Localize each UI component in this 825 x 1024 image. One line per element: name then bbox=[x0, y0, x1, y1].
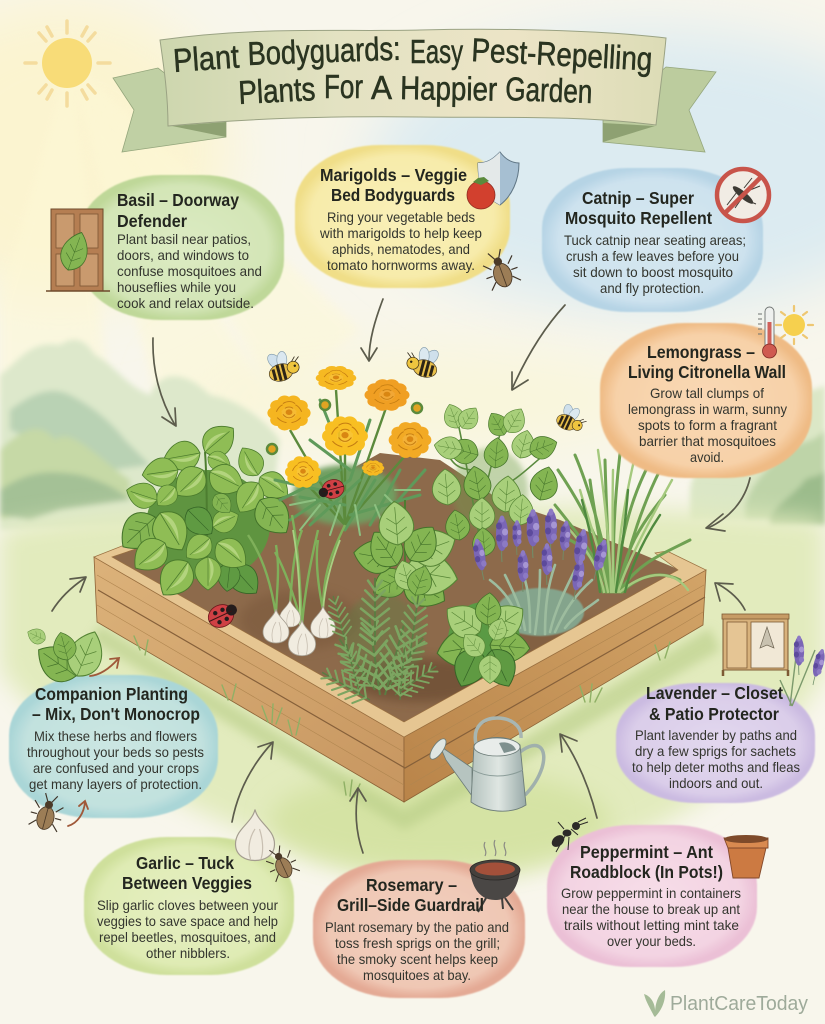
arrow: catnip to plant bbox=[512, 305, 565, 390]
title banner: For bbox=[324, 68, 363, 105]
panel: marigolds: Ring your vegetable beds bbox=[327, 209, 475, 225]
icon: terracotta pot bbox=[724, 835, 768, 878]
panel: companion planting: throughout your beds so pests bbox=[27, 744, 204, 760]
title banner: Bodyguards: bbox=[247, 30, 401, 72]
icon: beetle and arrow bbox=[27, 791, 88, 833]
panel: rosemary: Plant rosemary by the patio and bbox=[325, 919, 509, 935]
panel: companion planting: are confused and your crops bbox=[33, 760, 199, 776]
panel: catnip: Tuck catnip near seating areas; bbox=[564, 232, 746, 248]
panel: marigolds bbox=[295, 145, 522, 292]
arrow: basil to plant bbox=[153, 338, 176, 426]
panel: basil: Basil – Doorway bbox=[117, 190, 239, 210]
title banner: Pest-Repelling bbox=[471, 31, 653, 77]
panel: basil: Defender bbox=[117, 211, 187, 231]
icon: thermometer and sun bbox=[758, 306, 813, 358]
arrow: garlic to bed bbox=[232, 742, 273, 822]
panel: companion planting bbox=[9, 625, 218, 833]
panel: garlic: Slip garlic cloves between your bbox=[97, 897, 278, 913]
panel: companion planting: get many layers of protection. bbox=[29, 776, 202, 792]
arrow: peppermint to bed bbox=[560, 734, 597, 818]
panel: marigolds: with marigolds to help keep bbox=[319, 225, 482, 241]
panel: companion planting: Mix these herbs and flowers bbox=[34, 728, 197, 744]
panel: lemongrass: spots to form a fragrant bbox=[638, 417, 777, 433]
panel: catnip: Catnip – Super bbox=[582, 188, 694, 208]
icon: grill bbox=[470, 840, 520, 912]
title banner: A bbox=[371, 69, 392, 106]
watering can bbox=[427, 718, 544, 811]
plant: peppermint bbox=[434, 592, 532, 693]
panel: peppermint: near the house to break up ant bbox=[562, 901, 740, 917]
panel: garlic: other nibblers. bbox=[146, 945, 230, 961]
panel: peppermint: Roadblock (In Pots!) bbox=[570, 862, 723, 882]
arrow: rosemary to bed bbox=[350, 788, 366, 853]
title banner: Easy bbox=[410, 33, 463, 70]
icon: lavender sprigs bbox=[780, 635, 825, 706]
background hills bbox=[0, 340, 825, 530]
plant: marigolds bbox=[267, 366, 431, 535]
panel: rosemary bbox=[313, 840, 525, 998]
panel: lavender: to help deter moths and fleas bbox=[632, 759, 800, 775]
panel: catnip: sit down to boost mosquito bbox=[573, 264, 733, 280]
panel: lavender: dry a few sprigs for sachets bbox=[635, 743, 796, 759]
icon: leaves and arrow bbox=[25, 625, 119, 690]
title banner: Plant bbox=[172, 37, 240, 79]
grass tufts bbox=[134, 636, 670, 797]
ladybug on bed bbox=[205, 599, 242, 631]
panel: lemongrass: avoid. bbox=[690, 449, 724, 465]
icon: closet with moth bbox=[722, 614, 789, 676]
panel: lemongrass bbox=[600, 306, 813, 478]
icon: garlic bulb and beetle bbox=[236, 810, 301, 883]
panel: lavender bbox=[616, 614, 825, 803]
bed: soil bbox=[112, 453, 680, 722]
title banner bbox=[113, 29, 716, 152]
panel: peppermint: over your beds. bbox=[607, 933, 696, 949]
raised garden bed bbox=[90, 453, 720, 830]
icon: beetle bbox=[479, 246, 522, 292]
panel: garlic: Between Veggies bbox=[122, 873, 252, 893]
panel: lemongrass: barrier that mosquitoes bbox=[639, 433, 776, 449]
panel: lavender: & Patio Protector bbox=[649, 704, 779, 724]
panel: rosemary: the smoky scent helps keep bbox=[337, 951, 498, 967]
bed: right wall bbox=[404, 570, 706, 802]
panel: companion planting: Companion Planting bbox=[35, 684, 188, 704]
panel: catnip: crush a few leaves before you bbox=[566, 248, 739, 264]
plant: basil bbox=[111, 417, 299, 605]
title banner: Plants bbox=[237, 70, 316, 111]
arrow: lavender to bed bbox=[715, 583, 745, 610]
icon: door with leaf bbox=[46, 209, 110, 291]
panel: catnip: and fly protection. bbox=[600, 280, 704, 296]
panel: lemongrass: lemongrass in warm, sunny bbox=[628, 401, 787, 417]
panel: marigolds: aphids, nematodes, and bbox=[332, 241, 470, 257]
bed: left wall bbox=[94, 557, 404, 802]
panel: lemongrass: Living Citronella Wall bbox=[628, 362, 786, 382]
panel: catnip: Mosquito Repellent bbox=[565, 208, 712, 228]
panel: marigolds: Marigolds – Veggie bbox=[320, 165, 467, 185]
logo: PlantCareToday: PlantCareToday bbox=[670, 993, 808, 1015]
panel: peppermint bbox=[547, 818, 768, 967]
arrow: marigolds to plant bbox=[361, 299, 383, 361]
arrow: companion to bed bbox=[52, 577, 86, 611]
title banner: Garden bbox=[505, 70, 593, 110]
icon: shield and tomato bbox=[467, 152, 519, 209]
panel: basil: houseflies while you bbox=[117, 279, 236, 295]
panel: basil: confuse mosquitoes and bbox=[117, 263, 262, 279]
plant: catnip bbox=[431, 401, 562, 557]
illustration: sun bbox=[25, 21, 110, 106]
panel: peppermint: trails without letting mint take bbox=[564, 917, 739, 933]
arrow: lemongrass to plant bbox=[706, 478, 750, 531]
plant: garlic bbox=[205, 515, 345, 656]
panel: peppermint: Peppermint – Ant bbox=[580, 842, 713, 862]
panel: rosemary: Rosemary – bbox=[366, 875, 457, 895]
panel: garlic: veggies to save space and help bbox=[97, 913, 278, 929]
panel: basil bbox=[46, 175, 284, 320]
icon: ant bbox=[549, 818, 588, 852]
panel: lemongrass: Lemongrass – bbox=[647, 342, 755, 362]
panel: peppermint: Grow peppermint in containers bbox=[561, 885, 741, 901]
panel: lavender: Plant lavender by paths and bbox=[635, 727, 797, 743]
panel: basil: Plant basil near patios, bbox=[117, 231, 251, 247]
plant: lavender bbox=[471, 508, 610, 636]
plant: lemongrass bbox=[555, 438, 690, 592]
panel: marigolds: tomato hornworms away. bbox=[327, 257, 475, 273]
panel: basil: doors, and windows to bbox=[117, 247, 249, 263]
panel: lavender: Lavender – Closet bbox=[646, 683, 783, 703]
panel: catnip bbox=[542, 168, 769, 312]
plant: lemon balm centre bbox=[351, 500, 461, 616]
bees bbox=[263, 341, 591, 436]
panel: basil: cook and relax outside. bbox=[117, 295, 254, 311]
panel: lavender: indoors and out. bbox=[669, 775, 763, 791]
logo: PlantCareToday bbox=[644, 990, 808, 1017]
panel: companion planting: – Mix, Don't Monocrop bbox=[32, 704, 200, 724]
panel: rosemary: Grill–Side Guardrail bbox=[337, 895, 484, 915]
panel: garlic bbox=[84, 810, 301, 975]
icon: no mosquito bbox=[717, 169, 769, 221]
title banner: Happier bbox=[400, 69, 498, 108]
panel: lemongrass: Grow tall clumps of bbox=[650, 385, 764, 401]
panel: rosemary: mosquitoes at bay. bbox=[363, 967, 471, 983]
panel: rosemary: toss fresh sprigs on the grill; bbox=[335, 935, 500, 951]
plant: rosemary bbox=[316, 578, 442, 710]
panel: garlic: Garlic – Tuck bbox=[136, 853, 234, 873]
bed: rim bbox=[94, 533, 706, 737]
panel: garlic: repel beetles, mosquitoes, and bbox=[99, 929, 276, 945]
lawn bbox=[0, 505, 825, 881]
panel: marigolds: Bed Bodyguards bbox=[331, 185, 455, 205]
